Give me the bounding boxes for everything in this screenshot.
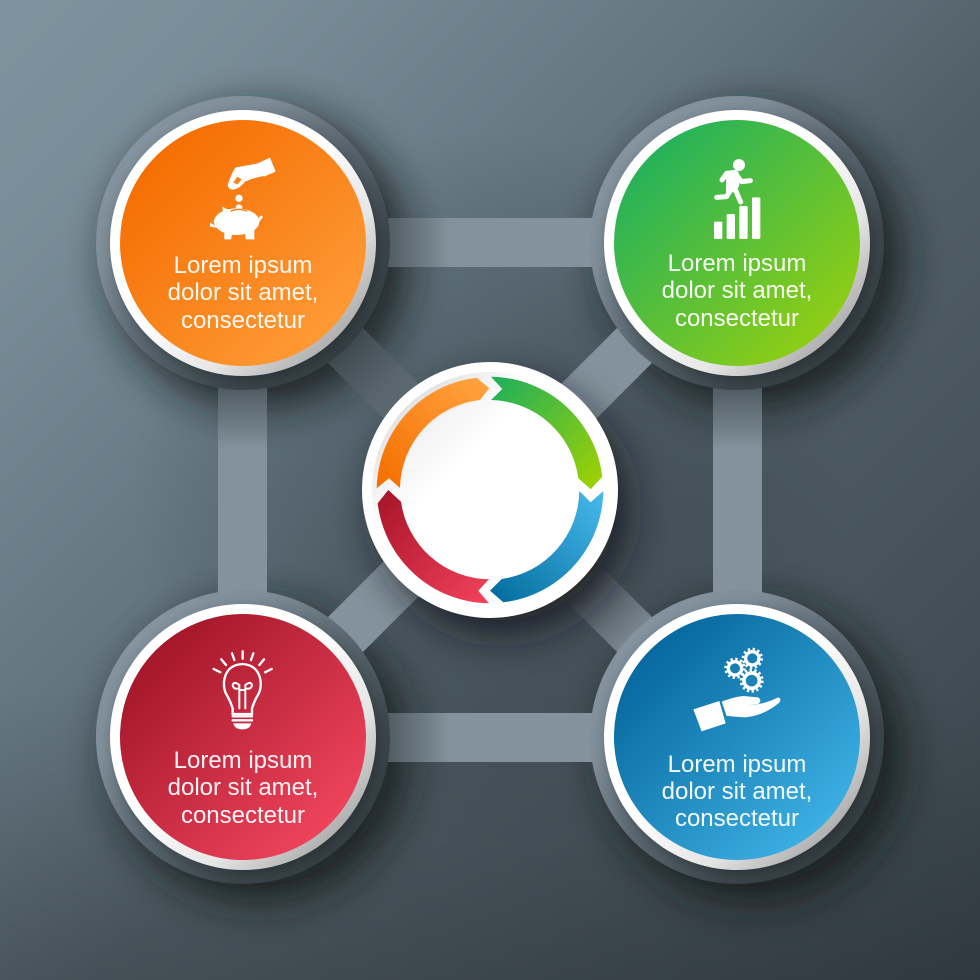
text: consectetur [181, 802, 305, 829]
white rim [604, 110, 870, 376]
white rim [110, 604, 376, 870]
arrow: orange [377, 378, 489, 488]
center shadow [376, 382, 628, 634]
halo [96, 96, 390, 390]
disc shadow [607, 609, 873, 875]
icon: light bulb [214, 651, 272, 729]
icon: hand holding gears [693, 649, 780, 731]
arrow: blue [490, 491, 603, 602]
panel shadows [109, 109, 903, 903]
center cycle diagram [362, 362, 628, 634]
arrow: green [491, 377, 602, 489]
icon: runner climbing bars [714, 159, 760, 239]
text: dolor sit amet, [662, 778, 812, 805]
disc shadow [113, 115, 379, 381]
center white disc [362, 362, 618, 618]
text: consectetur [181, 307, 305, 334]
text: dolor sit amet, [168, 774, 318, 801]
white rim [110, 110, 376, 376]
arrow: red [378, 490, 489, 603]
halo [590, 96, 884, 390]
disc shadow [113, 609, 379, 875]
icon: hand dropping coin in piggy bank [210, 158, 276, 239]
panel: blue step [590, 590, 884, 884]
blue disc [614, 614, 860, 860]
halo [590, 590, 884, 884]
white rim [604, 604, 870, 870]
center rim shading [372, 372, 608, 608]
halo [96, 590, 390, 884]
text: consectetur [675, 305, 799, 332]
text: Lorem ipsum [174, 747, 312, 774]
text: Lorem ipsum [174, 252, 312, 279]
text: consectetur [675, 805, 799, 832]
text: Lorem ipsum [668, 751, 806, 778]
panel: red step [96, 590, 390, 884]
panel: orange step [96, 96, 390, 390]
text: dolor sit amet, [662, 277, 812, 304]
text: Lorem ipsum [668, 250, 806, 277]
orange disc [120, 120, 366, 366]
red disc [120, 614, 366, 860]
center inner circle [401, 401, 579, 579]
disc shadow [607, 115, 873, 381]
green disc [614, 120, 860, 366]
text: dolor sit amet, [168, 279, 318, 306]
connector network [218, 218, 762, 762]
panel: green step [590, 96, 884, 390]
